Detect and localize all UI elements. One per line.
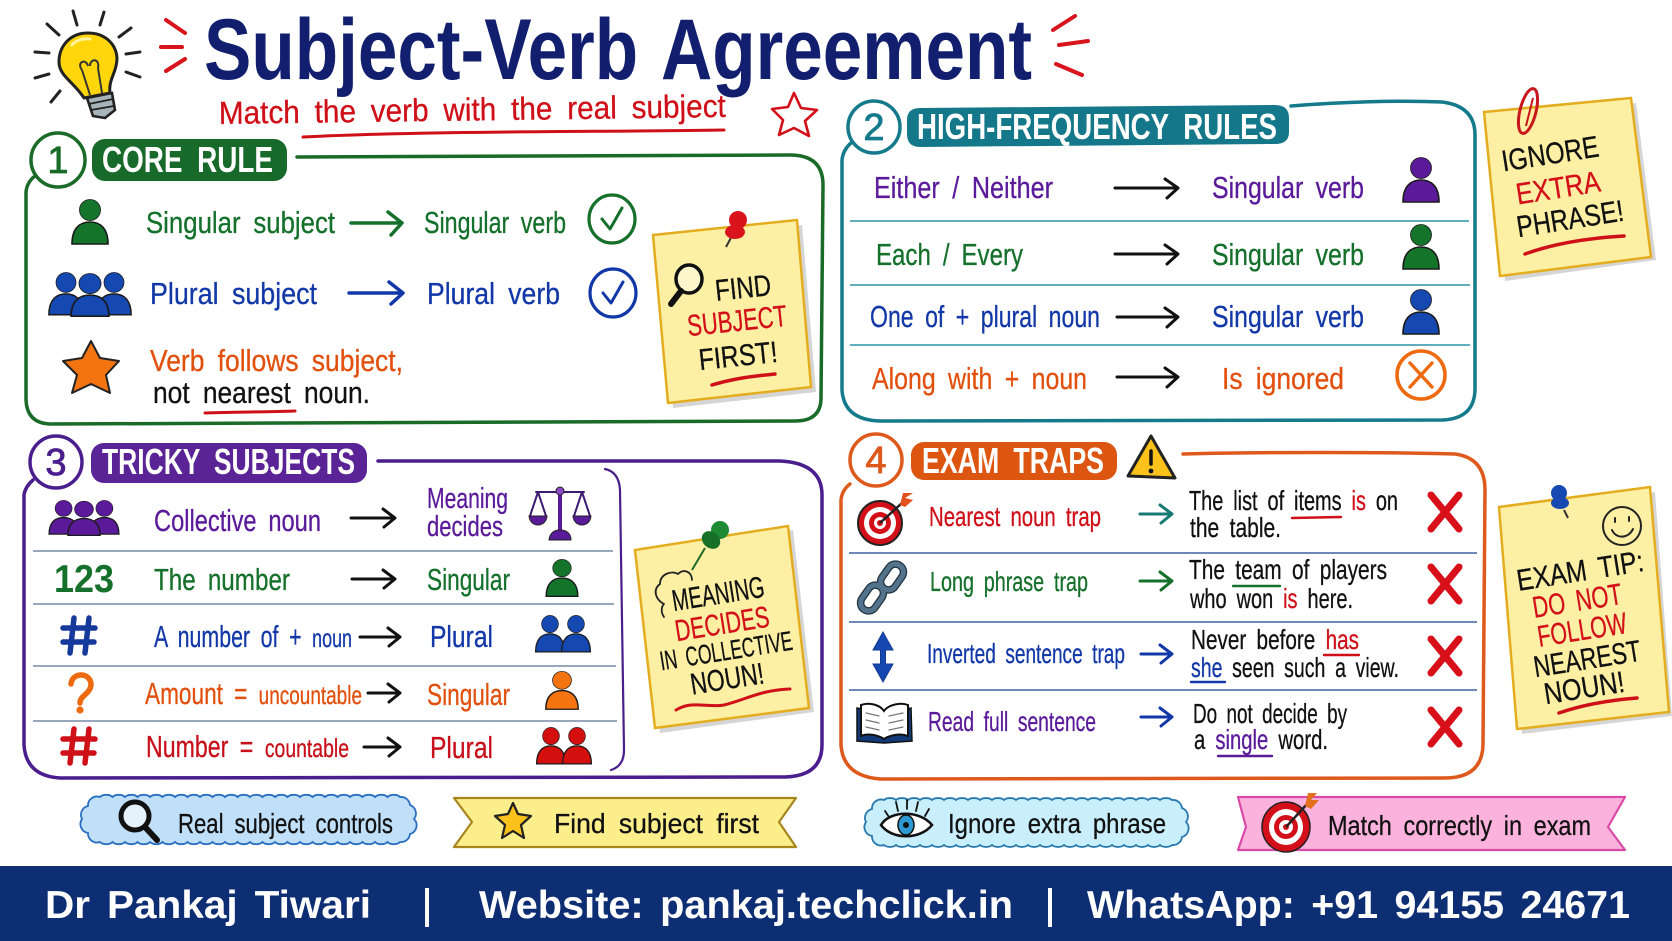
callout: ignore extra phrase bbox=[864, 798, 1189, 847]
icon: blue two people bbox=[536, 615, 590, 652]
text: is ignored: Is ignored bbox=[1222, 361, 1344, 396]
icon: orange x circle bbox=[1397, 351, 1445, 399]
badge number 1 bbox=[31, 133, 85, 187]
icon: red x bbox=[1431, 639, 1459, 673]
text: verb follows subject: Verb follows subject, bbox=[150, 343, 403, 378]
text: never before has: Never before has bbox=[1191, 624, 1359, 655]
note text: IN COLLECTIVE bbox=[658, 626, 795, 676]
icon: eye bbox=[881, 800, 932, 836]
icon: magnifier bbox=[121, 802, 157, 840]
text: either neither: Either / Neither bbox=[874, 170, 1053, 205]
text: the list of items: The list of items is on bbox=[1189, 485, 1398, 516]
icon: red pushpin bbox=[725, 211, 747, 247]
text: never before has bbox=[1191, 624, 1399, 683]
arrow: blue bbox=[1141, 645, 1172, 663]
text: meaning decides: Meaning bbox=[427, 483, 508, 515]
text: singular: Singular bbox=[427, 562, 510, 597]
callout: match correctly in exam: Match correctly in exam bbox=[1328, 810, 1591, 841]
text: singular verb green: Singular verb bbox=[1212, 237, 1364, 272]
icon: target bbox=[858, 493, 913, 545]
text: singular verb blue: Singular verb bbox=[1212, 299, 1364, 334]
heading pill: exam traps: EXAM TRAPS bbox=[922, 440, 1104, 481]
note text: FIRST! bbox=[697, 336, 779, 377]
icon: blue person bbox=[1403, 290, 1439, 334]
badge number 2: 2 bbox=[863, 107, 885, 149]
icon: purple person bbox=[1403, 158, 1439, 202]
arrow bbox=[1117, 368, 1178, 387]
badge number 2 bbox=[848, 101, 900, 153]
callout: match correctly in exam bbox=[1238, 793, 1625, 852]
arrow bbox=[1115, 245, 1178, 264]
icon: singular person green bbox=[72, 200, 108, 244]
sticky note: exam tip bbox=[1499, 485, 1672, 734]
heading pill: core rule: CORE RULE bbox=[102, 139, 273, 180]
text: the team of players: The team of players bbox=[1189, 554, 1387, 585]
note text: PHRASE! bbox=[1514, 195, 1626, 244]
icon: red x bbox=[1431, 495, 1459, 529]
text: number countable: Number = countable bbox=[146, 729, 349, 764]
note text: FOLLOW bbox=[1535, 607, 1630, 654]
text: singular verb: Singular verb bbox=[424, 205, 566, 240]
text: plural red: Plural bbox=[430, 730, 493, 765]
arrow bbox=[351, 509, 395, 527]
title: Subject-Verb Agreement bbox=[204, 2, 1032, 98]
note text: SUBJECT bbox=[686, 300, 789, 343]
text: a number of plus noun: A number of + noun bbox=[154, 619, 352, 654]
callout: ignore extra phrase: Ignore extra phrase bbox=[948, 808, 1166, 839]
note text: EXAM TIP: bbox=[1514, 545, 1646, 598]
arrow: blue bbox=[349, 282, 403, 304]
icon: green person bbox=[546, 559, 578, 596]
note text: NOUN! bbox=[1542, 666, 1627, 711]
thought cloud bbox=[656, 571, 692, 617]
icon: purple people bbox=[49, 500, 119, 535]
badge number 4: 4 bbox=[865, 440, 887, 482]
badge number 1: 1 bbox=[47, 140, 69, 182]
arrow bbox=[352, 570, 395, 588]
badge number 3 bbox=[30, 436, 82, 488]
callout: find subject first bbox=[454, 798, 796, 847]
text: never before has: she seen such a view. bbox=[1191, 652, 1399, 683]
note text: DO NOT bbox=[1530, 578, 1624, 625]
sticky note: find subject first bbox=[653, 211, 816, 408]
arrow bbox=[1117, 308, 1178, 327]
note text bbox=[686, 269, 789, 377]
icon: green check circle bbox=[589, 195, 635, 243]
icon: blue check circle bbox=[590, 269, 636, 317]
footer bar bbox=[0, 866, 1672, 941]
icon: magnifier bbox=[671, 265, 702, 304]
text: the team of players: who won is here. bbox=[1189, 583, 1353, 614]
sticky note: meaning decides bbox=[635, 521, 814, 733]
note text bbox=[1514, 545, 1646, 711]
icon: red x bbox=[1431, 710, 1459, 744]
subtitle: Match the verb with the real subject bbox=[219, 88, 726, 131]
panel: exam traps bbox=[841, 434, 1485, 779]
panel: core rule bbox=[26, 133, 823, 424]
text: not nearest noun: not nearest noun. bbox=[153, 375, 370, 410]
arrow: teal bbox=[1140, 505, 1172, 523]
icon: red hash bbox=[63, 729, 95, 763]
note text: NOUN! bbox=[688, 657, 766, 702]
text: each every: Each / Every bbox=[876, 237, 1023, 272]
row dividers bbox=[849, 553, 1477, 690]
badge number 3: 3 bbox=[45, 442, 67, 484]
icon: warning triangle bbox=[1128, 436, 1175, 478]
panel: high-frequency rules bbox=[842, 101, 1475, 421]
text: nearest noun trap: Nearest noun trap bbox=[929, 501, 1101, 532]
footer: name: Dr Pankaj Tiwari bbox=[45, 884, 371, 927]
arrow: green bbox=[351, 212, 402, 235]
icon: red x bbox=[1431, 567, 1459, 601]
icon: blue pushpin bbox=[1551, 485, 1569, 518]
arrow bbox=[368, 684, 400, 702]
callout: find subject first: Find subject first bbox=[554, 808, 759, 839]
icon: open book bbox=[857, 704, 912, 743]
icon: orange person bbox=[546, 671, 578, 709]
arrow bbox=[360, 628, 400, 646]
icon: balance scale bbox=[529, 487, 591, 540]
note text bbox=[1499, 131, 1626, 244]
text: the team of players bbox=[1189, 554, 1387, 614]
inner bracket bbox=[605, 469, 624, 770]
arrow: green bbox=[1140, 572, 1172, 590]
text: do not decide: Do not decide by bbox=[1193, 698, 1347, 729]
text: do not decide: a single word. bbox=[1194, 724, 1328, 755]
arrow bbox=[364, 738, 400, 756]
text: meaning decides: decides bbox=[427, 511, 503, 543]
text: long phrase trap: Long phrase trap bbox=[930, 566, 1088, 597]
icon: chain link bbox=[857, 561, 907, 614]
text: plural blue: Plural bbox=[430, 619, 493, 654]
text: plural verb: Plural verb bbox=[427, 276, 560, 311]
decorative red ticks left of title bbox=[161, 20, 185, 71]
text: read full sentence: Read full sentence bbox=[928, 706, 1096, 737]
icon: red two people bbox=[537, 727, 591, 764]
text: plural subject: Plural subject bbox=[150, 276, 317, 311]
footer: website: Website: pankaj.techclick.in bbox=[479, 884, 1013, 927]
text: one of plural noun: One of + plural noun bbox=[870, 299, 1100, 334]
note text: DECIDES bbox=[673, 601, 772, 648]
icon: gold star bbox=[495, 803, 531, 838]
arrow bbox=[1115, 179, 1178, 198]
decorative red ticks right of title bbox=[1053, 16, 1088, 75]
icon: up down arrow bbox=[873, 632, 893, 682]
badge number 4 bbox=[850, 434, 902, 486]
text: singular verb purple: Singular verb bbox=[1212, 170, 1364, 205]
note text: MEANING bbox=[670, 571, 767, 618]
icon: blue hash bbox=[63, 618, 95, 653]
text: meaning decides bbox=[427, 483, 508, 543]
icon: plural people blue bbox=[49, 272, 131, 316]
footer: separator bbox=[1048, 888, 1052, 927]
text: singular orange: Singular bbox=[427, 677, 510, 712]
icon: green person bbox=[1403, 224, 1439, 269]
row dividers bbox=[33, 551, 617, 721]
text: 123: 123 bbox=[54, 558, 114, 601]
icon: target bbox=[1262, 793, 1319, 852]
text: the list of items bbox=[1189, 485, 1398, 543]
callout: real subject controls bbox=[80, 795, 417, 844]
icon: light bulb bbox=[35, 11, 140, 118]
row dividers bbox=[850, 221, 1470, 345]
text: collective noun: Collective noun bbox=[154, 503, 321, 538]
panel: tricky subjects bbox=[24, 436, 822, 778]
callout: real subject controls: Real subject controls bbox=[178, 808, 393, 839]
text: along with noun: Along with + noun bbox=[872, 361, 1087, 396]
icon: green pushpin bbox=[692, 521, 729, 570]
text: the list of items: the table. bbox=[1190, 512, 1281, 543]
heading pill: high-frequency rules: HIGH-FREQUENCY RULES bbox=[917, 106, 1277, 147]
note text bbox=[658, 571, 795, 702]
text: do not decide bbox=[1193, 698, 1347, 756]
footer: separator bbox=[425, 888, 429, 927]
arrow: blue bbox=[1141, 708, 1172, 726]
footer: whatsapp: WhatsApp: +91 94155 24671 bbox=[1087, 884, 1630, 927]
text: the number: The number bbox=[154, 562, 290, 597]
icon: smiley bbox=[1603, 507, 1641, 545]
icon: orange question mark bbox=[71, 675, 91, 714]
note text: FIND bbox=[714, 269, 773, 308]
text: amount uncountable: Amount = uncountable bbox=[145, 676, 362, 711]
note text: EXTRA bbox=[1514, 166, 1603, 211]
text: singular subject: Singular subject bbox=[146, 205, 335, 240]
icon: paper clip bbox=[1515, 87, 1541, 135]
sticky note: ignore extra phrase bbox=[1484, 87, 1656, 281]
icon: red star outline bbox=[772, 93, 817, 136]
heading pill: tricky subjects: TRICKY SUBJECTS bbox=[102, 441, 355, 482]
text: inverted sentence trap: Inverted sentence trap bbox=[927, 638, 1125, 669]
icon: orange star bbox=[63, 341, 119, 393]
note text: IGNORE bbox=[1499, 131, 1601, 178]
